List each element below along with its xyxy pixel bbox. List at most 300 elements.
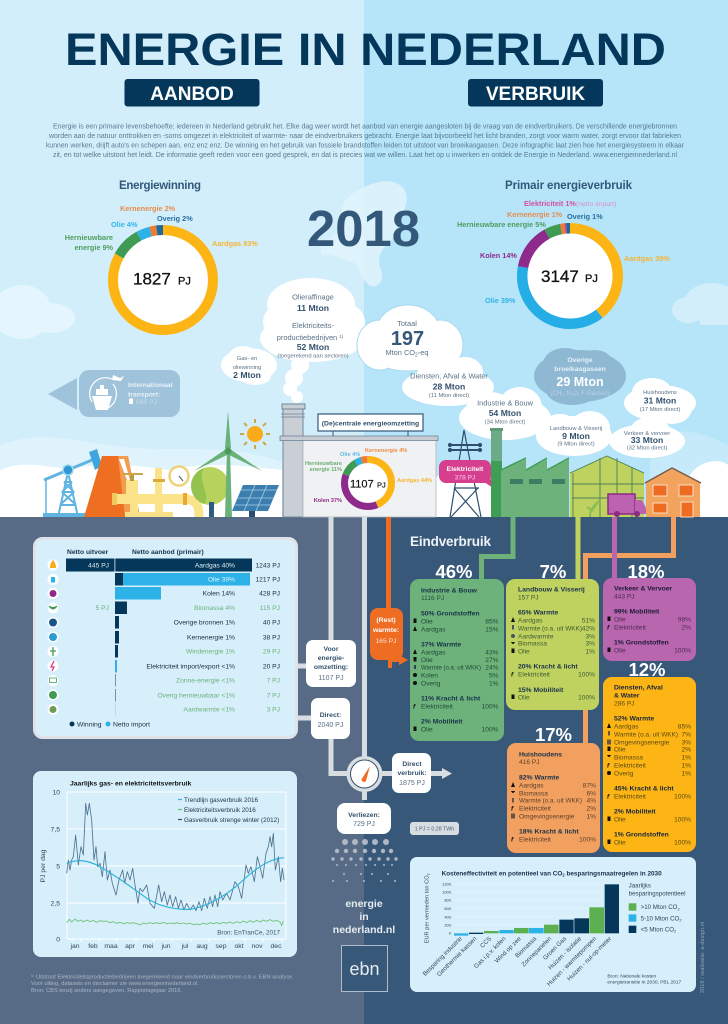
category labels: Huizen - warmtepompen: [546, 935, 598, 988]
box: industrie en bouw: 15%: [485, 626, 499, 634]
illustration: sun: [240, 419, 270, 449]
note: unit conversion: [410, 822, 459, 835]
donut chart: energiewinning: [113, 230, 213, 330]
background hills: [0, 432, 728, 520]
cloud: diensten afval water: Diensten, Afval & Water: [410, 372, 488, 380]
donut labels: energiewinning: energie 9%: [74, 243, 114, 252]
website label: in: [359, 911, 369, 923]
box: industrie en bouw: 50% Grondstoffen: [421, 610, 480, 618]
cloud: industrie en bouw: [459, 387, 551, 440]
background cloud: right: [672, 283, 728, 325]
donut labels: primair energieverbruik: Kernenergie 1%: [507, 210, 563, 219]
row values: 1217 PJ: [255, 576, 280, 584]
legend: Bron: EnTranCe, 2017: [217, 930, 280, 936]
legend: >10 Mton CO: [641, 904, 677, 911]
box: industrie en bouw: 1116 PJ: [421, 595, 444, 602]
row values: 38 PJ: [263, 634, 280, 642]
cloud: verkeer en vervoer: (32 Mton direct): [627, 446, 667, 452]
donut labels: energieomzetting: [305, 448, 432, 504]
callout: elektriciteit: Elektriciteit: [447, 466, 484, 473]
legend: Jaarlijks: [629, 882, 651, 889]
coloured flow pipes: [388, 517, 674, 746]
intro text: worden aan de natuur onttrokken en -soms omgezet in elektriciteit of warmte- naar de eindverbruikers gebracht. Energie laat bijvoorbeeld het licht branden, zorgt voor warm water, zorgt ervoor dat fabrieken: [48, 133, 681, 140]
donut labels: energiewinning: Hernieuwbare: [65, 233, 113, 242]
row labels: Aardgas 40%: [195, 562, 235, 570]
box: verkeer en vervoer: 98%: [678, 616, 691, 624]
box: diensten afval water: f: [607, 794, 610, 800]
axis labels: 2,5: [51, 900, 60, 908]
cloud: olieraffinage and elektriciteit: 52 Mton: [297, 342, 329, 352]
illustration: factory: [490, 428, 569, 517]
box: direct: Direct:: [320, 712, 341, 719]
cloud: overige broeikasgassen: (CH: [550, 391, 561, 397]
cloud: verkeer en vervoer: Verkeer & vervoer: [624, 431, 670, 437]
badge: aanbod: AANBOD: [150, 84, 234, 105]
footnotes: ¹⁾ Uitstoot Elektriciteitsproductiebedrijven toegerekend naar eindverbruikssectoren o.b.v. EBN analyse.: [31, 974, 294, 980]
internationaal transport callout: [48, 370, 180, 417]
box: industrie en bouw: 37% Warmte: [421, 642, 461, 648]
box: industrie en bouw: 100%: [482, 726, 499, 734]
box: direct verbruik: Direct: [402, 761, 422, 768]
legend: Netto import: [113, 722, 150, 728]
donut labels: energieomzetting: Kolen 37%: [314, 498, 342, 504]
box: verkeer en vervoer: Olie: [614, 616, 626, 624]
cloud: industrie en bouw: Industrie & Bouw: [477, 398, 534, 408]
callout: elektriciteit: 378 PJ: [455, 474, 475, 482]
box: verkeer en vervoer: Olie: [614, 648, 626, 654]
box: verkeer en vervoer: 2%: [681, 624, 691, 632]
legend: 2: [674, 929, 677, 934]
box: diensten afval water: 1%: [681, 770, 691, 778]
box: huishoudens: Elektriciteit: [519, 836, 551, 844]
map of the Netherlands: [321, 181, 407, 287]
cloud: landbouw en visserij: 9 Mton: [562, 431, 590, 441]
donut labels: energiewinning: Overig 2%: [157, 214, 193, 223]
bars: [66, 558, 252, 716]
callout: elektriciteit: [439, 460, 501, 493]
box: landbouw en visserij: Elektriciteit: [518, 672, 550, 678]
row labels: Kernenergie 1%: [187, 634, 235, 642]
donut chart: primair energieverbruik: 3147: [541, 267, 579, 286]
box: huishoudens: Aardgas: [519, 782, 544, 790]
illustration: yellow pipes and gauge: [112, 466, 199, 517]
box: industrie en bouw: Olie: [421, 618, 433, 626]
cloud: gas- en oliewinning: oliewinning: [233, 365, 261, 371]
category labels: Besparing industrie: [422, 935, 464, 978]
legend: [629, 882, 685, 934]
cloud: overige broeikasgassen: Overige: [567, 357, 593, 364]
percentage labels: 17%: [535, 724, 572, 745]
box: industrie en bouw: Olie: [421, 657, 433, 664]
box: huishoudens: 4%: [586, 798, 596, 804]
energy conversion plant: (De)centrale energieomzetting: [322, 420, 419, 428]
axis labels: maa: [104, 943, 118, 950]
illustration: pylon: [448, 430, 482, 517]
chart title: 2: [562, 873, 565, 878]
heading: eindverbruik: Eindverbruik: [410, 534, 491, 549]
ground: right: [364, 517, 728, 1024]
legend: Gasverbruik strenge winter (2012): [184, 817, 279, 824]
box: industrie en bouw: [410, 579, 504, 741]
ground: left: [0, 517, 364, 1024]
panel: CO2 bar chart: 2: [427, 873, 431, 875]
box: industrie en bouw: Kolen: [421, 672, 438, 680]
donut labels: energieomzetting: Aardgas 44%: [397, 478, 432, 484]
box: diensten afval water: 7%: [681, 732, 691, 738]
box: diensten afval water: [603, 677, 696, 852]
background: verbruik side: [364, 0, 728, 520]
box: landbouw en visserij: 20% Kracht & licht: [518, 664, 578, 670]
donut labels: primair energieverbruik: Olie 39%: [485, 296, 516, 305]
box: landbouw en visserij: f: [511, 672, 514, 678]
box: landbouw en visserij: [506, 579, 599, 710]
box: huishoudens: f: [511, 806, 514, 812]
illustration: wind turbine: [194, 411, 262, 517]
cloud: olieraffinage and elektriciteit: 11 Mton: [297, 303, 329, 313]
box: diensten afval water: 100%: [674, 816, 691, 824]
y axis labels: 800: [444, 898, 452, 903]
box: diensten afval water: 100%: [674, 794, 691, 800]
website label: energie: [345, 898, 383, 910]
category labels: CCS: [479, 935, 493, 950]
logo: ebn: ebn: [349, 959, 380, 979]
box: diensten afval water: 2% Mobiliteit: [614, 808, 656, 816]
box: verkeer en vervoer: 1% Grondstoffen: [614, 640, 669, 646]
box: huishoudens: [507, 743, 600, 853]
box: huishoudens: Elektriciteit: [519, 806, 551, 812]
donut chart: energieomzetting: PJ: [377, 480, 386, 490]
arrow: direct verbruik: [431, 768, 452, 779]
donut chart: energiewinning: 1827: [133, 270, 171, 288]
row values: 115 PJ: [260, 605, 280, 612]
cloud: huishoudens: Huishoudens: [643, 390, 677, 396]
cloud: landbouw en visserij: [536, 411, 612, 456]
row labels: Overig hernieuwbaar <1%: [157, 692, 235, 700]
row labels: Aardwarmte <1%: [184, 706, 235, 714]
donut labels: primair energieverbruik: [457, 199, 670, 305]
icon: ship and plane: [90, 375, 124, 410]
illustration: truck: [608, 494, 647, 517]
box: landbouw en visserij: 65% Warmte: [518, 610, 558, 616]
box: direct: [311, 698, 350, 739]
year: 2018: [307, 200, 420, 257]
donut labels: energiewinning: Kernenergie 2%: [120, 204, 176, 213]
axis labels: PJ per dag: [40, 849, 47, 882]
category labels: Groen Gas: [542, 935, 568, 962]
box: industrie en bouw: 1%: [489, 680, 499, 688]
box: huishoudens: 416 PJ: [519, 759, 540, 766]
box: huishoudens: 2%: [586, 806, 596, 812]
bars: [454, 884, 619, 936]
cloud: olieraffinage and elektriciteit: 1): [339, 334, 344, 339]
box: rest warmte: (Rest): [376, 617, 396, 624]
percentage labels: 46%: [435, 561, 473, 582]
axis labels: 5: [56, 864, 60, 870]
box: diensten afval water: 1% Grondstoffen: [614, 832, 669, 838]
axis labels: 10: [52, 790, 60, 796]
box: landbouw en visserij: 42%: [582, 626, 595, 632]
box: huishoudens: Warmte (o.a. uit WKK): [519, 798, 582, 804]
axis labels: nov: [252, 943, 263, 950]
illustration: tree: [191, 467, 229, 517]
cloud: gas- en oliewinning: [221, 346, 277, 385]
axis labels: sep: [216, 943, 227, 950]
donut labels: primair energieverbruik: Aardgas 39%: [624, 254, 670, 263]
note: unit conversion: 1 PJ = 0,28 TWh: [415, 826, 454, 832]
axis labels: 0: [56, 936, 60, 944]
axis labels: 7,5: [51, 826, 60, 834]
axis labels: jul: [181, 943, 189, 950]
panel: CO2 bar chart: EUR per vermeden ton CO: [425, 875, 431, 943]
box: diensten afval water: 286 PJ: [614, 700, 635, 708]
box: rest warmte: 165 PJ: [375, 638, 397, 645]
illustration: greenhouse: [570, 456, 644, 517]
illustration: solar panel: [232, 485, 279, 517]
badge: aanbod: [124, 79, 260, 106]
cloud: olieraffinage and elektriciteit: (toegerekend aan sectoren): [277, 354, 349, 360]
box: verkeer en vervoer: 100%: [674, 648, 691, 654]
box: diensten afval water: 1%: [681, 762, 691, 770]
box: landbouw en visserij: 100%: [578, 672, 595, 678]
box: industrie en bouw: Industrie & Bouw: [421, 588, 478, 594]
grid and axis: [67, 792, 286, 942]
row values: 445 PJ: [88, 562, 109, 570]
donut labels: energieomzetting: Kernenergie 4%: [365, 448, 407, 454]
title: ENERGIE IN NEDERLAND: [65, 24, 666, 75]
footnotes: Voor uitleg, datasets en disclaimer zie www.energieinnederland.nl.: [31, 981, 199, 987]
y axis labels: 200: [444, 922, 452, 927]
cloud: olieraffinage and elektriciteit: [260, 278, 365, 403]
category labels: Huizen - isolatie: [547, 935, 583, 971]
box: landbouw en visserij: Olie: [518, 694, 530, 702]
box: huishoudens: 1%: [586, 814, 596, 820]
category labels: [422, 935, 613, 988]
box: diensten afval water: 100%: [674, 840, 691, 846]
cloud: gas- en oliewinning: 2 Mton: [233, 370, 261, 380]
donut chart: primair energieverbruik: [522, 228, 618, 324]
box: diensten afval water: Olie: [614, 840, 626, 846]
box: huishoudens: 82% Warmte: [519, 774, 559, 782]
category labels: Gas i.p.v. kolen: [473, 935, 508, 970]
box: industrie en bouw: Aardgas: [421, 650, 446, 656]
cloud: olieraffinage and elektriciteit: productiebedrijven: [277, 333, 337, 342]
box: industrie en bouw: Overig: [421, 680, 441, 688]
footnotes: [31, 974, 294, 994]
row labels: Elektriciteit import/export <1%: [146, 664, 235, 670]
icon: gauge: [346, 756, 382, 792]
box: industrie en bouw: 5%: [489, 672, 499, 680]
donut labels: energiewinning: [65, 204, 258, 252]
intro text: kunnen werken, drijft auto's en schepen aan, enz enz enz. De winning en het gebruik van fossiele brandstoffen leiden tot uitstoot van broeikasgassen. Deze infographic laat zien hoe het energiesysteem in elkaar: [46, 142, 685, 150]
illustration: cooling tower: [84, 456, 140, 517]
box: diensten afval water: 85%: [678, 724, 691, 730]
y axis labels: [442, 882, 452, 936]
y axis labels: 0: [449, 931, 452, 936]
donut labels: energiewinning: Aardgas 83%: [212, 239, 258, 248]
credit line: 2018 / realisatie: a-design.nl: [700, 922, 706, 993]
cloud: overige broeikasgassen: , N: [563, 391, 571, 397]
box: landbouw en visserij: Aardgas: [518, 618, 543, 624]
box: industrie en bouw: 2% Mobiliteit: [421, 718, 463, 726]
box: voor energieomzetting: 1107 PJ: [318, 675, 344, 682]
cloud: olieraffinage and elektriciteit: Elektriciteits-: [292, 321, 334, 330]
y axis labels: 600: [444, 906, 452, 911]
cloud: totaal: Mton CO: [385, 348, 415, 357]
box: diensten afval water: Aardgas: [614, 724, 639, 730]
box: diensten afval water: Warmte (o.a. uit WKK): [614, 732, 678, 738]
cloud: totaal: [357, 305, 463, 371]
box: diensten afval water: f: [607, 762, 610, 770]
box: diensten afval water: Elektriciteit: [614, 762, 646, 770]
illustration: pump jack: [43, 449, 102, 517]
box: diensten afval water: Omgevingsenergie: [614, 740, 670, 746]
box: huishoudens: 87%: [583, 782, 596, 790]
box: voor energieomzetting: omzetting:: [314, 664, 348, 671]
cloud: olieraffinage and elektriciteit: Olieraffinage: [292, 292, 334, 302]
donut labels: primair energieverbruik: Kolen 14%: [480, 251, 517, 260]
cloud: overige broeikasgassen: 2: [571, 392, 574, 397]
box: direct verbruik: verbruik:: [397, 770, 427, 777]
y axis labels: 400: [444, 914, 452, 919]
donut labels: primair energieverbruik: (netto import): [576, 201, 616, 208]
box: industrie en bouw: Aardgas: [421, 626, 446, 634]
box: landbouw en visserij: Warmte (o.a. uit WKK): [518, 626, 582, 632]
legend: 5-10 Mton CO: [641, 915, 679, 922]
box: direct: 2040 PJ: [318, 722, 343, 729]
panel: line chart gas and electricity: [33, 771, 297, 957]
donut labels: energieomzetting: Olie 4%: [340, 452, 360, 458]
dots: losses: [331, 839, 398, 882]
website label: [333, 898, 395, 936]
row values: 40 PJ: [263, 620, 280, 626]
box: diensten afval water: 3%: [681, 740, 691, 746]
cloud: totaal: -eq: [418, 348, 429, 357]
box: verkeer en vervoer: f: [607, 624, 610, 632]
box: verkeer en vervoer: [603, 578, 696, 661]
intro text: [46, 124, 685, 159]
legend: [70, 722, 150, 728]
cloud: overige broeikasgassen: [534, 348, 626, 405]
box: direct verbruik: 1875 PJ: [399, 780, 425, 787]
cloud: diensten afval water: [402, 357, 494, 406]
donut labels: energieomzetting: energie 11%: [310, 467, 342, 473]
box: huishoudens: 18% Kracht & licht: [519, 828, 579, 836]
illustration: house: [645, 468, 701, 517]
legend: besparingspotentieel: [629, 890, 685, 897]
cloud: landbouw en visserij: Landbouw & Visserij: [550, 426, 602, 432]
legend: Winning: [77, 722, 102, 728]
box: diensten afval water: 2%: [681, 746, 691, 754]
intro text: Energie is een primaire levensbehoefte; iedereen in Nederland gebruikt het. Elke dag weer wordt het aanbod van energie aangesloten bij de vraag van de eindverbruikers. De verschillende energiebronnen: [53, 124, 677, 130]
gray flow pipes: [298, 517, 394, 800]
background: aanbod side: [0, 0, 364, 520]
axis labels: mei: [143, 943, 154, 950]
cloud: totaal: 2: [415, 352, 418, 358]
cloud: huishoudens: (17 Mton direct): [640, 407, 680, 413]
source: Bron: Nationale kosten: [607, 973, 656, 979]
line series: [67, 803, 284, 926]
percentage labels: 12%: [628, 659, 666, 680]
intro text: zit, en tot welke uitstoot het leidt. De informatie geeft reden voor een goed gesprek, en dat is precies wat we willen. Laat het op u inwerken en ontdek de Energie in Nederland. www.energieinnederland.nl: [53, 152, 677, 159]
row values: [88, 562, 280, 714]
source: energietransitie in 2030, PBL 2017: [607, 979, 682, 985]
percentage labels: 18%: [627, 561, 665, 582]
website label: nederland.nl: [333, 924, 395, 936]
source icons: [48, 560, 58, 715]
axis labels: okt: [234, 943, 244, 950]
panel: netto aanbod bar chart: Netto uitvoer: [67, 549, 109, 556]
box: diensten afval water: Diensten, Afval: [614, 684, 663, 692]
grid: [453, 884, 619, 925]
box: industrie en bouw: 43%: [485, 650, 499, 656]
box: voor energieomzetting: Voor: [324, 646, 339, 653]
box: verkeer en vervoer: 443 PJ: [614, 594, 635, 600]
cloud: totaal: 197: [391, 328, 424, 350]
cloud: totaal: Totaal: [397, 319, 417, 328]
panel: netto aanbod bar chart: [34, 538, 296, 738]
axis labels: dec: [271, 943, 282, 950]
box: landbouw en visserij: 1%: [585, 648, 595, 656]
donut chart: energieomzetting: 1107: [350, 478, 374, 490]
y axis labels: 1000: [442, 890, 452, 895]
row labels: Biomassa 4%: [194, 605, 235, 612]
cloud: huishoudens: [624, 378, 696, 424]
cloud: overige broeikasgassen: 4: [561, 392, 564, 397]
footnotes: Bron: CBS tenzij anders aangegeven. Rapportagejaar 2016.: [31, 988, 182, 994]
donut labels: energiewinning: Olie 4%: [111, 220, 138, 229]
panel: CO2 bar chart: [410, 857, 696, 992]
box: diensten afval water: 52% Warmte: [614, 716, 654, 722]
box: diensten afval water: Olie: [614, 816, 626, 824]
box: verkeer en vervoer: Verkeer & Vervoer: [614, 586, 673, 592]
row labels: Overige bronnen 1%: [174, 620, 235, 626]
row labels: Windenergie 1%: [186, 648, 235, 656]
cloud: overige broeikasgassen: broeikasgassen: [554, 366, 606, 373]
donut labels: primair energieverbruik: Hernieuwbare energie 5%: [457, 220, 546, 229]
internationaal transport callout: transport:: [128, 392, 160, 398]
heading: energiewinning: Energiewinning: [119, 180, 201, 192]
axis labels: [40, 790, 282, 950]
box: huishoudens: Omgevingsenergie: [519, 814, 575, 820]
internationaal transport callout: 685 PJ: [136, 399, 157, 406]
row values: 20 PJ: [263, 664, 280, 670]
box: rest warmte: [370, 608, 408, 668]
box: diensten afval water: Elektriciteit: [614, 794, 646, 800]
cloud: industrie en bouw: 54 Mton: [489, 408, 521, 418]
box: huishoudens: f: [511, 836, 514, 844]
axis labels: jan: [69, 943, 80, 950]
box: rest warmte: warmte:: [372, 627, 399, 634]
row labels: Olie 39%: [208, 576, 235, 584]
legend: Elektriciteitsverbruik 2016: [184, 807, 256, 814]
cloud: huishoudens: 31 Mton: [644, 396, 676, 406]
legend: [178, 797, 280, 936]
row labels: Kolen 14%: [203, 590, 235, 598]
source: [607, 973, 682, 985]
donut chart: energiewinning: PJ: [178, 276, 191, 288]
box: landbouw en visserij: Olie: [518, 648, 530, 656]
box: huishoudens: Huishoudens: [519, 752, 562, 758]
box: landbouw en visserij: Aardwarmte: [518, 634, 554, 640]
donut chart: primair energieverbruik: PJ: [585, 273, 598, 285]
donut chart: energieomzetting: [344, 460, 392, 506]
box: diensten afval water: Biomassa: [614, 754, 643, 762]
donut labels: primair energieverbruik: Overig 1%: [567, 212, 603, 221]
row values: 29 PJ: [263, 648, 280, 656]
legend: 2: [677, 906, 680, 911]
chart title: Kosteneffectiviteit en potentieel van CO: [442, 870, 567, 877]
cloud: diensten afval water: (11 Mton direct): [429, 393, 469, 399]
